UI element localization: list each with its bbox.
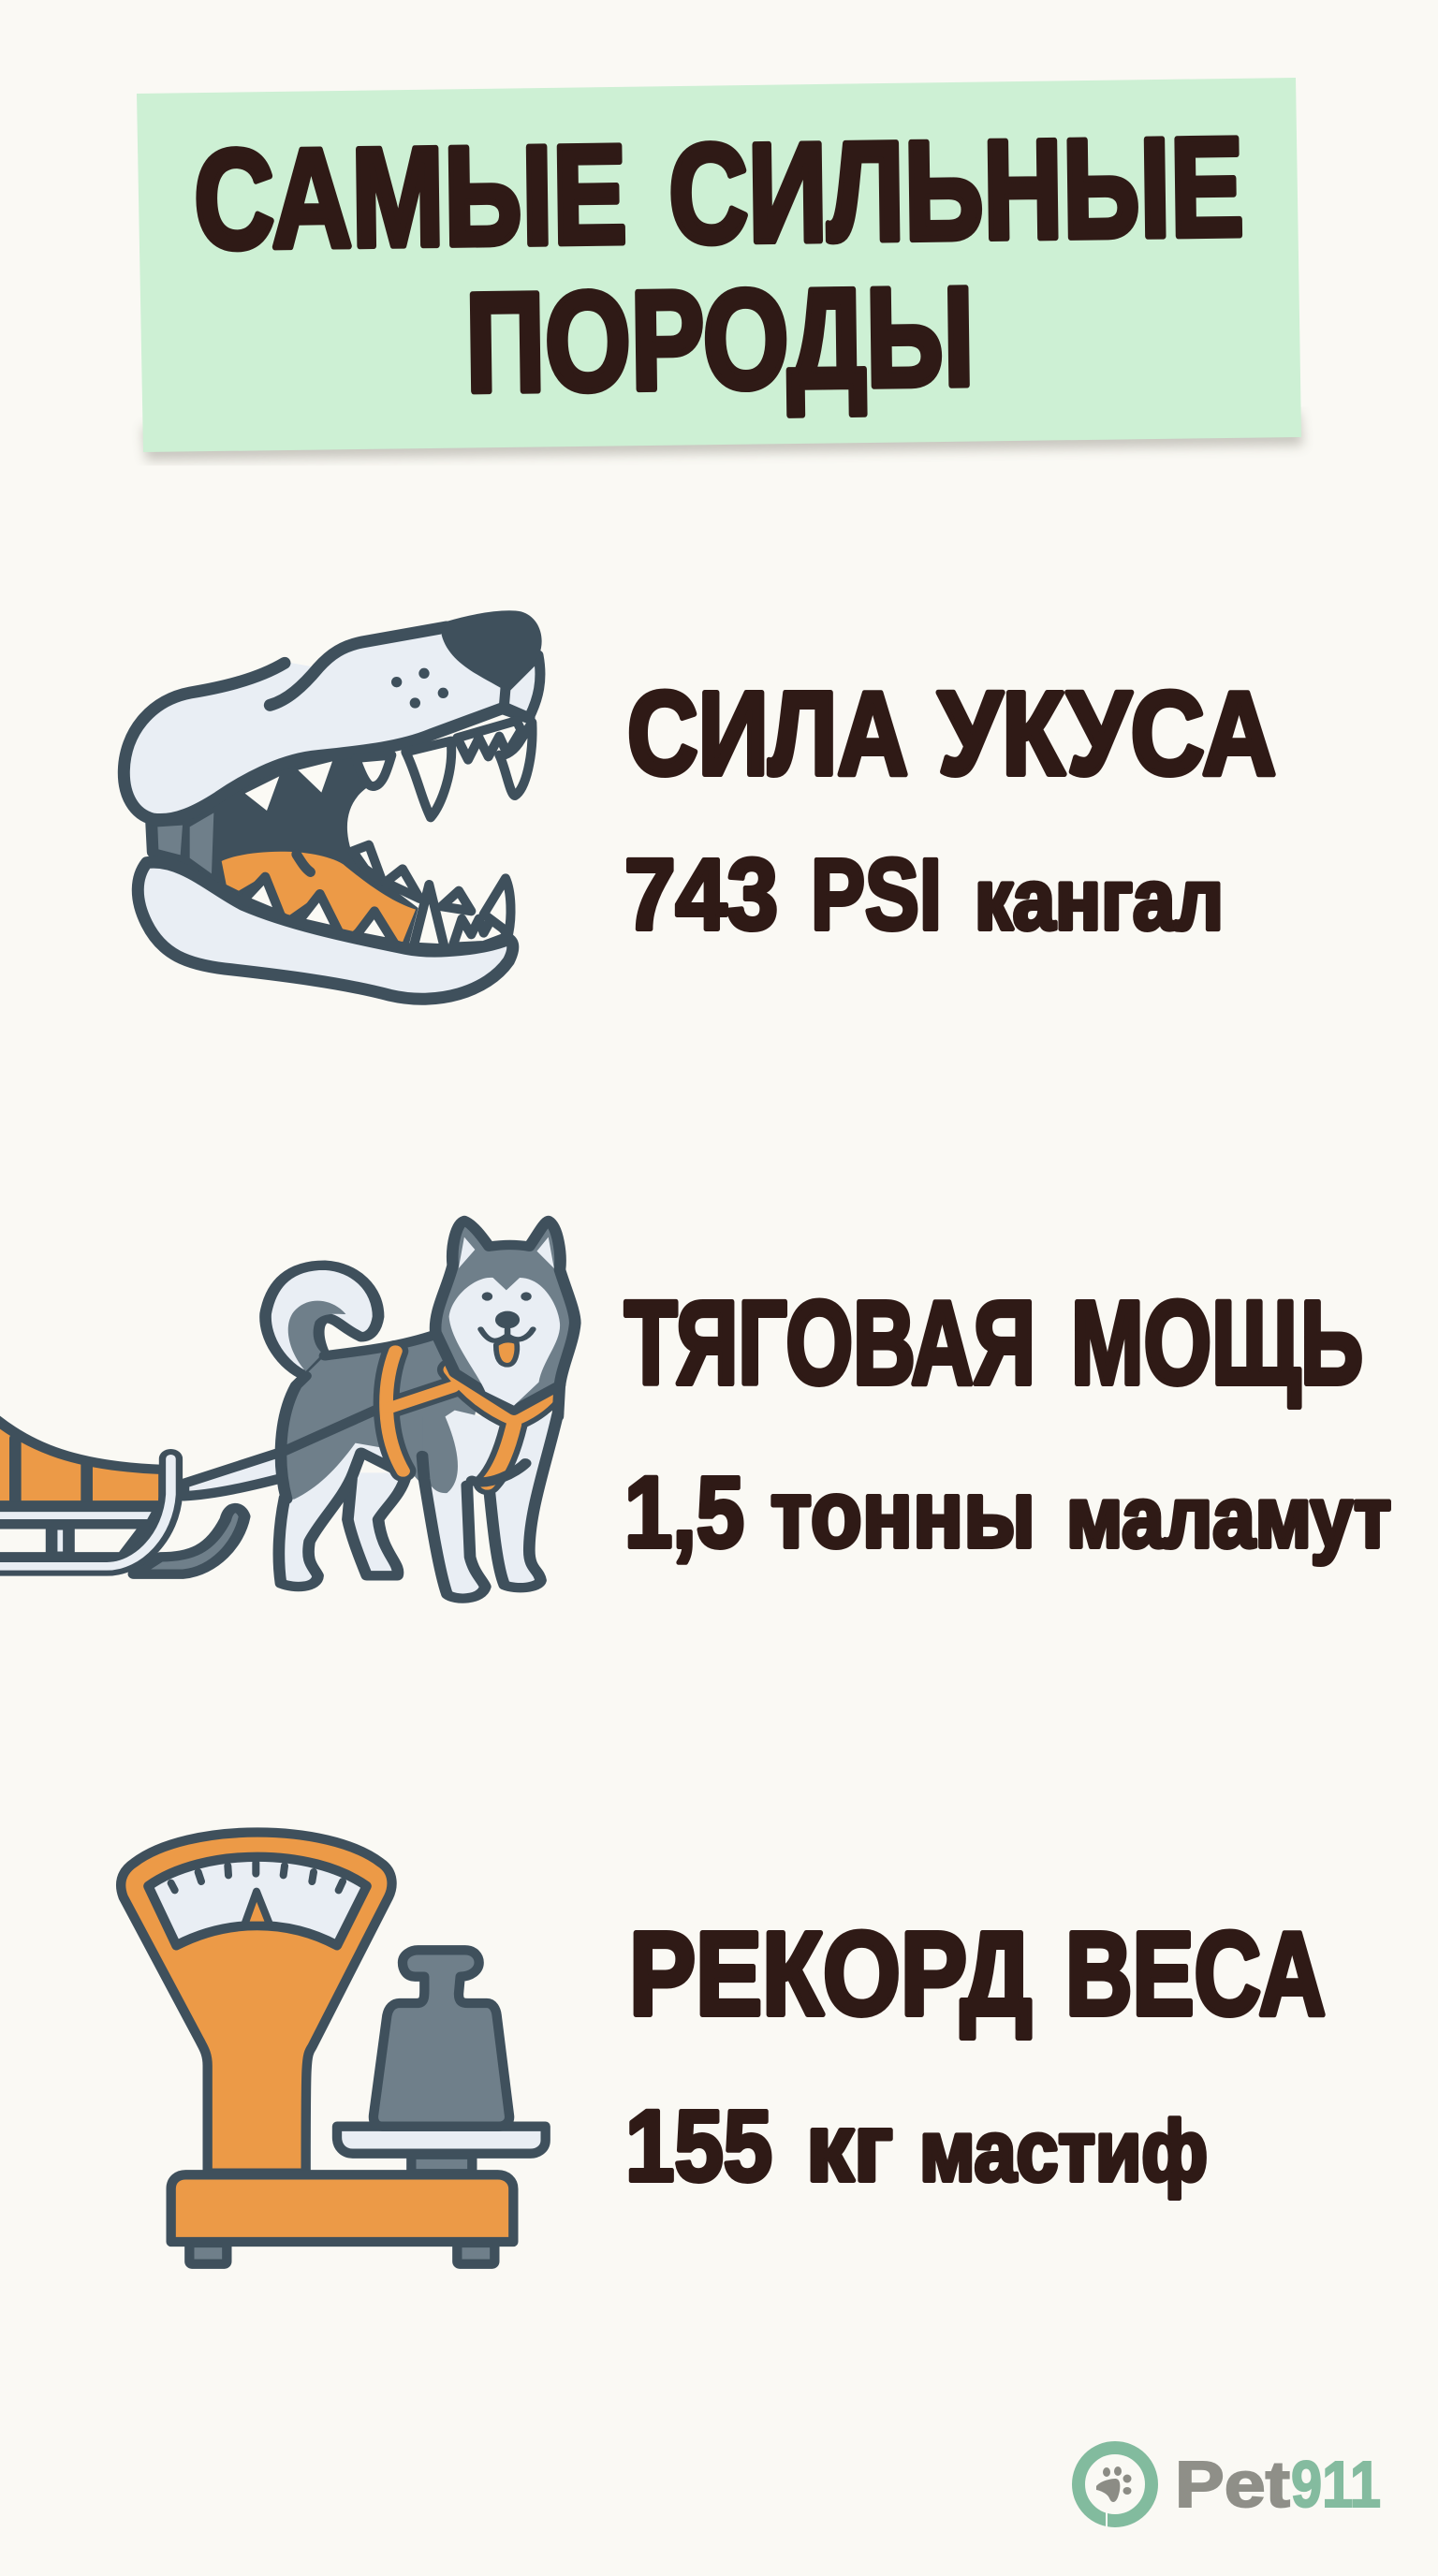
logo wordmark: 911: [1291, 2448, 1381, 2521]
pan: [337, 2127, 546, 2154]
heading: weight record: [629, 1908, 1326, 2040]
ear inners: [459, 1237, 554, 1268]
breed: mastiff: мастиф: [919, 2104, 1208, 2200]
sled basket: [0, 1416, 165, 1505]
logo wordmark: Pet: [1175, 2448, 1290, 2521]
hinge plates: [157, 812, 213, 873]
front leg outlines: [422, 1413, 558, 1599]
far hind leg: [347, 1472, 405, 1575]
dial: [148, 1857, 367, 1945]
sled post centre: [51, 1525, 68, 1557]
heading: weight record: РЕКОРД: [629, 1908, 1032, 2040]
tail shade: [288, 1301, 345, 1371]
paw line: [472, 1463, 525, 1482]
tow line: [285, 1407, 382, 1451]
chest and front legs: [422, 1411, 558, 1599]
heading: weight record: ВЕСА: [1065, 1908, 1326, 2040]
runner: [0, 1458, 170, 1566]
upper teeth: [245, 721, 533, 817]
heading: bite force: УКУСА: [938, 667, 1276, 799]
block: bite force: [624, 667, 1276, 951]
title: САМЫЕ: [193, 115, 627, 278]
logo ring: [1078, 2448, 1152, 2527]
weight: [374, 1950, 509, 2127]
nose: [495, 1311, 520, 1328]
tongue: [222, 852, 416, 943]
runner inner: [0, 1458, 170, 1566]
heading: pulling power: ТЯГОВАЯ: [624, 1277, 1035, 1409]
tow ropes: [183, 1451, 285, 1496]
scale base: [171, 2174, 513, 2242]
scale body: [121, 1832, 392, 2174]
needle: [244, 1892, 270, 1925]
heading: bite force: СИЛА: [627, 667, 908, 799]
body: [281, 1334, 477, 1500]
tail: [266, 1266, 378, 1376]
dial ticks: [171, 1863, 343, 1890]
pan post: [411, 2155, 472, 2174]
icon: dog jaws: [124, 610, 542, 999]
unit: kg: кг: [806, 2095, 893, 2202]
block: weight record: [625, 1908, 1326, 2202]
hinge: [152, 808, 215, 877]
value: 155: 155: [625, 2089, 772, 2202]
value: 1,5: 1,5: [624, 1455, 744, 1569]
dog mouth: [480, 1329, 533, 1340]
brow line: [270, 627, 447, 705]
skull outline: [124, 663, 529, 820]
snout front: [504, 655, 540, 718]
title: [193, 108, 1244, 421]
ski tip: [134, 1508, 244, 1574]
title: ПОРОДЫ: [464, 257, 975, 421]
sled rail: [0, 1507, 160, 1524]
logo: Pet911: [1078, 2448, 1381, 2527]
mouth interior: [211, 754, 418, 945]
icon: sled dog: [0, 1221, 575, 1599]
whisker dots: [391, 668, 448, 709]
breed: malamute: маламут: [1066, 1470, 1391, 1565]
value: 743 PSI: [624, 837, 942, 951]
sled dividers: [15, 1439, 87, 1505]
head: [435, 1221, 575, 1411]
scale feet: [189, 2243, 494, 2264]
shoulder patch: [422, 1416, 458, 1493]
lower jaw: [138, 862, 513, 999]
sled post: [0, 1524, 147, 1557]
unit: tons: тонны: [770, 1460, 1035, 1567]
icon: weighing scale: [121, 1832, 546, 2264]
title panel: [137, 78, 1303, 461]
value: 743 PSI: PSI: [811, 837, 942, 951]
title: СИЛЬНЫЕ: [668, 108, 1244, 272]
logo paw: [1096, 2466, 1131, 2502]
upper skull: [124, 627, 506, 820]
nose: [442, 610, 542, 691]
body outline: [281, 1334, 437, 1500]
heading: bite force: [627, 667, 1276, 799]
near hind leg: [279, 1442, 402, 1587]
block: pulling power: [624, 1277, 1391, 1569]
value: 743 PSI: 743: [624, 837, 778, 951]
face: [449, 1278, 560, 1406]
breed: kangal: кангал: [975, 852, 1224, 947]
logo wordmark: [1175, 2448, 1381, 2521]
dog tongue: [496, 1340, 517, 1365]
harness: [387, 1351, 549, 1484]
lower teeth: [243, 845, 511, 948]
neck edge: [558, 1383, 560, 1416]
tongue notch: [297, 855, 311, 872]
eyes: [482, 1292, 532, 1301]
